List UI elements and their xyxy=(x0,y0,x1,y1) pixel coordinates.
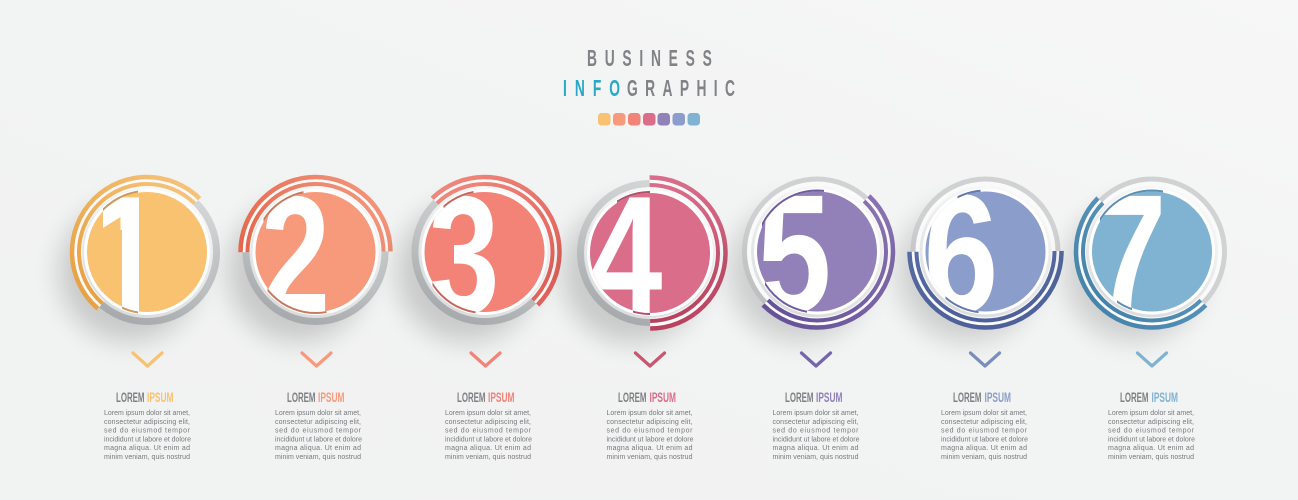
text 1: consectetur adipiscing elit, xyxy=(104,419,190,426)
label 2: IPSUM xyxy=(318,390,344,405)
title line: infographic xyxy=(563,77,735,102)
text 4: consectetur adipiscing elit, xyxy=(606,419,693,426)
step 5 xyxy=(729,160,893,461)
text 5 xyxy=(772,410,860,461)
badge 2: 2 xyxy=(261,162,330,349)
text 6 xyxy=(941,410,1028,461)
step 3 xyxy=(396,161,560,461)
text 7: minim veniam, quis nostrud xyxy=(1108,454,1194,461)
label 7: IPSUM xyxy=(1152,390,1178,405)
text 7: consectetur adipiscing elit, xyxy=(1108,419,1194,426)
text 3: consectetur adipiscing elit, xyxy=(445,419,531,426)
label 1: IPSUM xyxy=(147,390,174,405)
chevron 5 xyxy=(802,353,830,366)
label 2: LOREM xyxy=(287,390,316,405)
text 3: Lorem ipsum dolor sit amet, xyxy=(445,410,531,417)
text 6: minim veniam, quis nostrud xyxy=(941,454,1027,461)
label 3: LOREM xyxy=(457,390,486,405)
text 1: sed do eiusmod tempor xyxy=(104,428,191,434)
heading xyxy=(563,47,735,126)
text 3: sed do eiusmod tempor xyxy=(445,428,532,434)
text 6: consectetur adipiscing elit, xyxy=(941,419,1027,426)
label 6: IPSUM xyxy=(984,390,1011,405)
chevron 4 xyxy=(636,353,664,366)
text 2: Lorem ipsum dolor sit amet, xyxy=(275,410,361,417)
title line: infographic: GRAPHIC xyxy=(627,77,735,102)
badge 4 xyxy=(562,161,726,349)
step 4 xyxy=(562,161,726,461)
badge 5: 5 xyxy=(757,160,831,348)
text 5: consectetur adipiscing elit, xyxy=(772,419,859,426)
text 4: sed do eiusmod tempor xyxy=(606,428,693,434)
text 7: incididunt ut labore et dolore xyxy=(1108,436,1195,443)
text 7: magna aliqua. Ut enim ad xyxy=(1108,445,1194,452)
step 6 xyxy=(898,160,1062,461)
text 1: minim veniam, quis nostrud xyxy=(104,454,190,461)
text 1: Lorem ipsum dolor sit amet, xyxy=(104,410,190,417)
badge 6: 6 xyxy=(924,160,998,348)
text 5: minim veniam, quis nostrud xyxy=(772,454,859,461)
badge 5 xyxy=(729,160,893,348)
chevron 3 xyxy=(471,353,500,366)
text 6: incididunt ut labore et dolore xyxy=(941,436,1028,443)
text 5: Lorem ipsum dolor sit amet, xyxy=(772,410,859,417)
text 7 xyxy=(1108,410,1195,461)
text 1: incididunt ut labore et dolore xyxy=(104,436,191,443)
text 7: sed do eiusmod tempor xyxy=(1108,428,1195,434)
text 7: Lorem ipsum dolor sit amet, xyxy=(1108,410,1194,417)
badge 1 xyxy=(59,161,222,349)
colour swatches xyxy=(598,113,700,126)
label 7: LOREM xyxy=(1120,390,1148,405)
badge 6 xyxy=(898,160,1062,348)
text 4: minim veniam, quis nostrud xyxy=(606,454,693,461)
text 3: minim veniam, quis nostrud xyxy=(445,454,531,461)
badge 3: 3 xyxy=(428,161,500,349)
badge 3 xyxy=(396,161,560,349)
chevron 7 xyxy=(1138,353,1166,366)
text 6: Lorem ipsum dolor sit amet, xyxy=(941,410,1027,417)
label 4: LOREM xyxy=(618,390,646,405)
text 2 xyxy=(275,410,362,461)
badge 1: 1 xyxy=(81,161,175,349)
text 3: magna aliqua. Ut enim ad xyxy=(445,445,531,452)
text 2: minim veniam, quis nostrud xyxy=(275,454,361,461)
text 3: incididunt ut labore et dolore xyxy=(445,436,532,443)
infographic canvas xyxy=(48,50,1227,460)
label 3: IPSUM xyxy=(488,390,514,405)
text 4: magna aliqua. Ut enim ad xyxy=(606,445,693,452)
text 5: magna aliqua. Ut enim ad xyxy=(772,445,859,452)
title line: business: BUSINESS xyxy=(587,47,712,72)
chevron 2 xyxy=(302,353,331,366)
text 4: Lorem ipsum dolor sit amet, xyxy=(606,410,693,417)
label 5: IPSUM xyxy=(816,390,842,405)
text 1: magna aliqua. Ut enim ad xyxy=(104,445,190,452)
title line: infographic: INFO xyxy=(563,77,620,102)
text 6: sed do eiusmod tempor xyxy=(941,428,1028,434)
badge 4: 4 xyxy=(590,161,662,349)
text 4: incididunt ut labore et dolore xyxy=(606,436,694,443)
text 3 xyxy=(445,410,532,461)
label 1: LOREM xyxy=(116,390,144,405)
text 5: incididunt ut labore et dolore xyxy=(772,436,860,443)
text 5: sed do eiusmod tempor xyxy=(772,428,859,434)
text 6: magna aliqua. Ut enim ad xyxy=(941,445,1027,452)
label 6: LOREM xyxy=(953,390,982,405)
text 2: consectetur adipiscing elit, xyxy=(275,419,361,426)
step 2 xyxy=(228,162,390,461)
text 2: incididunt ut labore et dolore xyxy=(275,436,362,443)
text 2: sed do eiusmod tempor xyxy=(275,428,362,434)
chevron 1 xyxy=(133,353,162,366)
step 7 xyxy=(1064,160,1228,461)
label 4: IPSUM xyxy=(650,390,676,405)
badge 7: 7 xyxy=(1094,160,1166,347)
step 1 xyxy=(59,161,222,461)
chevron 6 xyxy=(970,353,1000,366)
badge 7 xyxy=(1064,160,1228,347)
label 5: LOREM xyxy=(785,390,814,405)
text 4 xyxy=(606,410,694,461)
text 1 xyxy=(104,410,191,461)
badge 2 xyxy=(228,162,390,349)
text 2: magna aliqua. Ut enim ad xyxy=(275,445,361,452)
